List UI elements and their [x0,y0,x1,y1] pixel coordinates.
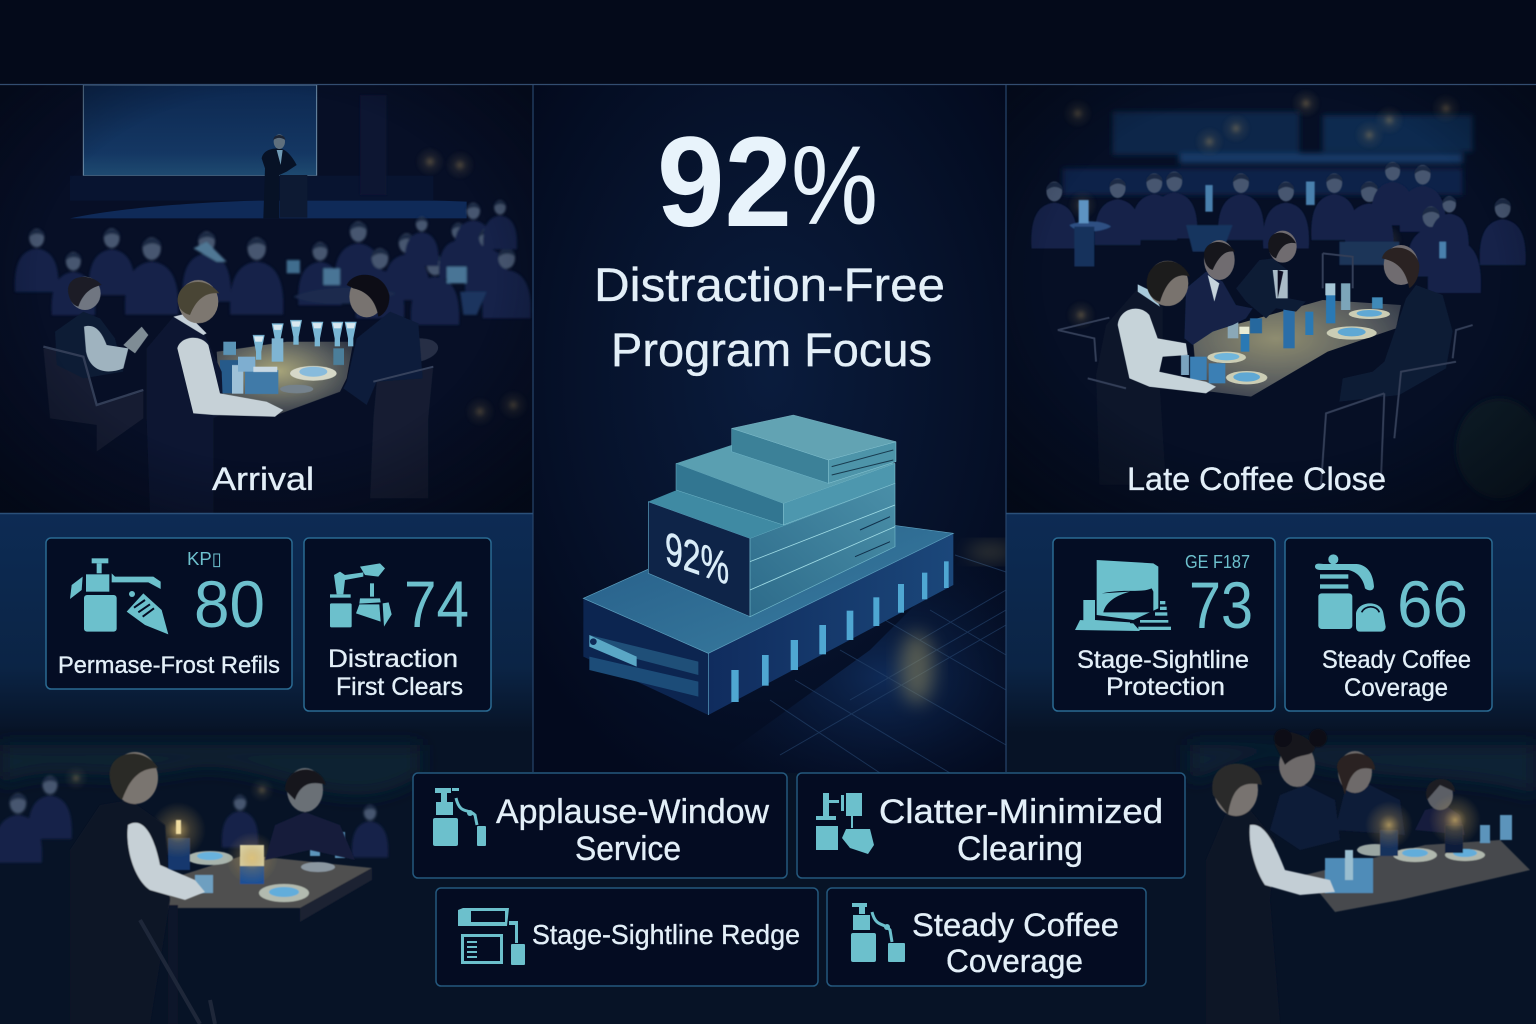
icon: console [458,908,525,965]
band rule left [0,512,533,514]
label [328,645,463,701]
KPI tag: KP▯ [187,549,222,569]
base platform [583,510,953,715]
label [496,793,769,868]
title [594,258,945,376]
label: Clearing [957,830,1083,868]
icon: stage screen [1075,560,1171,631]
label: Distraction [328,645,458,673]
heading: Late Coffee Close: Late Coffee Close [1127,461,1386,497]
base display panel [589,635,698,697]
label: Coverage [1344,674,1448,702]
long table [1181,283,1401,397]
feature card: Applause-Window Service [413,773,787,878]
feature card: Stage-Sightline Redge [436,888,818,986]
label: Stage-Sightline Redge [532,919,800,950]
back wall glow [1063,112,1473,195]
panel: left KPI band [0,513,533,733]
feature card: Steady Coffee Coverage [827,888,1146,986]
tag: GE F187 [1185,552,1250,572]
heading: Arrival: Arrival [212,461,314,497]
table [150,802,372,1024]
foreground chair [43,347,143,405]
distant guests [0,766,388,863]
panel: bottom right scene [1190,729,1536,1024]
table with lanterns [1305,794,1530,912]
middle block [676,445,895,525]
label: Permase-Frost Refils [58,652,280,679]
label: Clatter-Minimized [879,793,1163,831]
label [1322,646,1471,702]
icon: sprayer [433,788,486,846]
audience crowd [15,200,531,325]
KPI card: Stage-Sightline Protection [1053,538,1275,711]
top block [732,415,896,483]
value 66: 66 [1397,567,1468,641]
panel: bottom left scene [0,745,420,1024]
foliage backdrop [0,745,420,795]
seated guest [265,768,355,860]
icon: clearing tools [816,793,874,854]
server [70,752,205,1024]
server leaning over table [1096,261,1216,485]
panel: center column [533,85,1006,773]
panel: late coffee close scene [1006,85,1536,515]
scene vignette left [0,85,533,513]
table with place settings [217,320,438,415]
title: Distraction-Free [594,258,945,311]
feature card: Clatter-Minimized Clearing [797,773,1185,878]
panel: arrival scene [0,85,533,515]
title: Program Focus [611,323,932,376]
label [879,793,1163,868]
value 74: 74 [404,567,469,641]
block label 92%: 92% [665,522,729,596]
column divider right [1005,85,1007,772]
label [912,907,1119,979]
metric: 92%: 92 [657,111,792,254]
icon: clearing tools [330,563,392,627]
background diners [1031,162,1526,293]
label: Coverage [946,943,1083,979]
label: Stage-Sightline [1077,646,1249,674]
lower backdrop [0,733,1536,1024]
KPI card: Distraction First Clears [304,538,491,711]
value 80: 80 [194,567,265,641]
stage [70,199,467,218]
foreground chair [140,920,215,1024]
label: Service [575,830,681,868]
panel: right KPI band [1006,513,1536,733]
tuxedo guest center [1236,231,1306,318]
presentation screen [83,85,317,176]
table glassware and bottles [1181,283,1383,383]
icon: sprayer bottle [851,903,905,962]
metric: 92%: % [791,123,878,248]
KPI card: Permase-Frost Refils [46,538,292,689]
label [1077,646,1249,701]
KPI card: Steady Coffee Coverage [1285,538,1492,711]
header rule [0,84,1536,86]
seated guest left [43,277,148,452]
stacked service cups [220,342,278,394]
column divider left [532,85,534,772]
server with vest [147,280,283,515]
tuxedo guest center-left [1184,240,1253,345]
metric: 92% [657,111,878,254]
plates [1207,309,1390,384]
ambient lights [1063,88,1461,462]
icon: sprayer and brush [70,558,168,634]
band rule right [1006,512,1536,514]
label: Steady Coffee [1322,646,1471,674]
label: Applause-Window [496,793,769,831]
floor grid [700,544,1014,773]
server [1206,764,1335,1024]
wall lights [415,147,528,427]
scene vignette right [1006,85,1536,513]
speaker at podium [262,134,307,218]
label: First Clears [336,673,463,701]
icon: tiered 92% stack [583,415,953,715]
foreground chairs [1058,253,1473,485]
suited guest right [1339,245,1453,402]
guest in dark suit right [343,275,433,498]
value 73: 73 [1189,568,1253,642]
top header band [0,0,1536,84]
icon: coffee pot and bag [1315,554,1386,632]
label: Steady Coffee [912,907,1119,943]
lower block [648,447,895,617]
label: Protection [1106,673,1225,701]
back row guests [1270,729,1465,850]
